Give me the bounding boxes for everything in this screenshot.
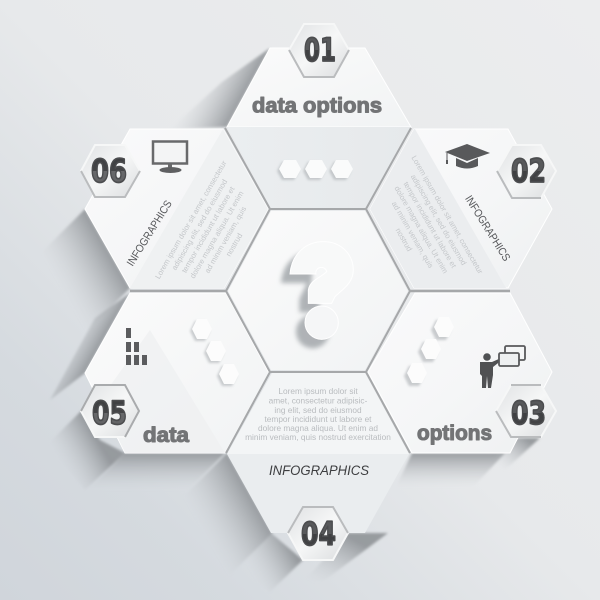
small hexagons: top <box>277 160 353 180</box>
text block: right rotated lorem: Lorem ipsum dolor sit amet, consectetur <box>410 154 485 276</box>
badge: 02: 02 <box>511 152 546 190</box>
badge: 01: 01 <box>304 31 336 69</box>
panel dividers <box>130 128 510 453</box>
text block: bottom lorem: amet, consectetur adipisic- <box>269 396 368 406</box>
long shadows <box>35 48 540 592</box>
text block: right rotated lorem: dolore magna aliqua. Ut enim <box>392 185 450 275</box>
panel: 04 bottom hexagon <box>227 373 409 533</box>
label: right rotated infographics: INFOGRAPHICS <box>462 194 512 264</box>
badge: 06 <box>81 145 140 197</box>
text block: right rotated lorem: nostrud <box>394 227 414 253</box>
badge: 01 <box>289 24 349 77</box>
text block: left rotated lorem: dolore magna aliqua. Ut enim <box>188 190 246 280</box>
text block: bottom lorem: dolore magna aliqua. Ut enim ad <box>258 423 378 433</box>
panel: 01 top hexagon <box>227 48 411 208</box>
text block: left rotated lorem: nostrud <box>224 232 244 258</box>
badge: 05 <box>81 385 139 437</box>
badge: 03: 03 <box>511 394 546 432</box>
badge: 04 <box>288 507 348 560</box>
text block: left rotated lorem: Lorem ipsum dolor sit amet, consectetur <box>153 159 229 280</box>
question mark icon <box>281 242 353 348</box>
panel: center hexagon <box>228 211 408 370</box>
text block: left rotated lorem: ad minim veniam, quis <box>203 205 248 275</box>
text block: right rotated lorem: ad minim veniam, quis <box>390 200 435 270</box>
text block: left rotated lorem: adipiscing elit, sed do eiusmod <box>170 178 229 272</box>
icon: presenter <box>480 346 525 388</box>
badge: 04: 04 <box>301 515 336 553</box>
heading: data options: data options <box>252 94 382 118</box>
text block: bottom lorem <box>245 386 391 442</box>
heading: options: options <box>417 422 492 445</box>
badge: 05: 05 <box>92 394 127 432</box>
text block: bottom lorem: Lorem ipsum dolor sit <box>278 386 358 396</box>
panel: 06 left upper hexagon <box>85 129 268 288</box>
text block: left rotated lorem <box>153 159 272 305</box>
panel: 05 lower left hexagon <box>85 293 269 453</box>
text block: right rotated lorem: adipiscing elit, sed do eiusmod <box>409 173 468 267</box>
text block: left rotated lorem: tempor incididunt ut labore et <box>180 184 237 274</box>
panel: 03 lower right hexagon <box>368 293 552 453</box>
badge: 03 <box>496 385 556 437</box>
text block: right rotated lorem <box>366 154 485 301</box>
label: bottom infographics: INFOGRAPHICS <box>269 463 369 478</box>
small hexagons: lower right <box>404 317 454 386</box>
icon: bar chart <box>126 328 147 365</box>
text block: bottom lorem: minim veniam, quis nostrud exercitation <box>245 432 391 442</box>
text block: bottom lorem: ing elit, sed do eiusmod <box>274 405 362 415</box>
badge: 02 <box>497 145 556 198</box>
heading: data: data <box>143 424 189 447</box>
text block: right rotated lorem: tempor incididunt ut labore et <box>401 180 459 270</box>
small hexagons: lower left <box>190 319 239 386</box>
icon: graduation cap <box>445 144 490 168</box>
badge: 06: 06 <box>91 152 127 190</box>
label: left rotated infographics: INFOGRAPHICS <box>125 199 175 269</box>
text block: bottom lorem: tempor incididunt ut labore et <box>264 414 372 424</box>
panel: 02 right upper hexagon <box>370 129 552 288</box>
icon: monitor <box>153 142 187 173</box>
